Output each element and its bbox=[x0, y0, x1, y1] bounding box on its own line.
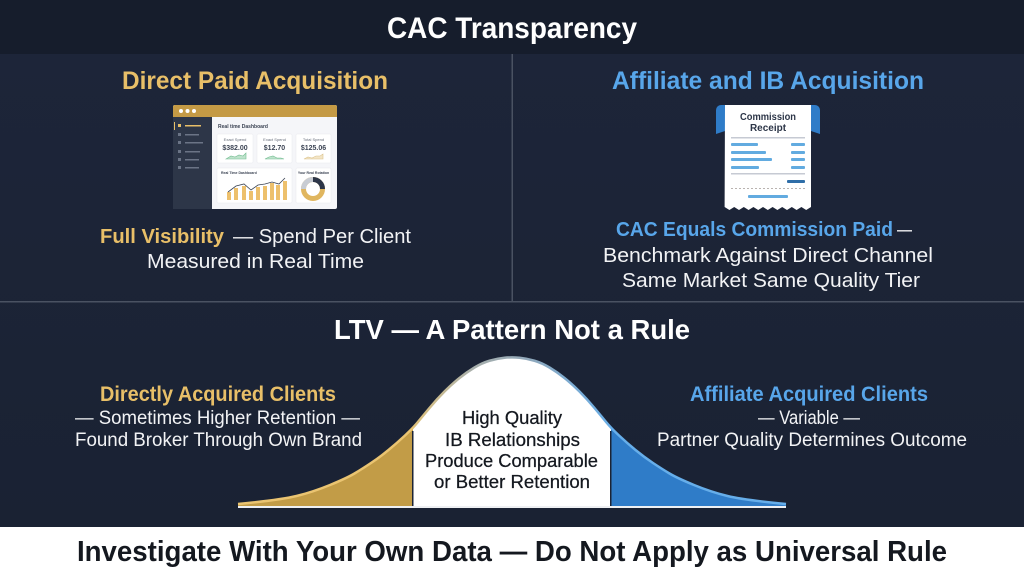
text: affiliate acquired clients: — Variable — bbox=[758, 408, 860, 429]
text: bell curve center: Produce Comparable bbox=[425, 450, 598, 471]
icon: real time dashboard: $382.00 bbox=[222, 145, 248, 152]
panel: direct paid acquisition bbox=[100, 67, 411, 273]
text: directly acquired clients: Found Broker Through Own Brand bbox=[75, 430, 362, 451]
icon: real time dashboard: Real Time Dashboard bbox=[221, 171, 257, 175]
icon: commission receipt: Receipt bbox=[750, 123, 787, 134]
text: CAC equals commission paid: — bbox=[897, 219, 912, 241]
icon: real time dashboard: $12.70 bbox=[264, 145, 285, 152]
title: CAC Transparency bbox=[387, 12, 637, 45]
icon: commission receipt bbox=[716, 105, 820, 210]
text: affiliate acquired clients bbox=[657, 383, 967, 451]
text: affiliate acquired clients: Partner Quality Determines Outcome bbox=[657, 430, 967, 451]
heading: direct paid: Direct Paid Acquisition bbox=[122, 67, 388, 95]
text: full visibility: — Spend Per Client bbox=[233, 225, 411, 248]
panel: LTV pattern bbox=[75, 314, 967, 508]
footer banner bbox=[0, 527, 1024, 572]
icon: real time dashboard: Real time Dashboard bbox=[218, 124, 268, 130]
panel: affiliate and IB acquisition bbox=[603, 67, 933, 292]
icon: real time dashboard: Total Spend bbox=[303, 137, 324, 142]
icon: real time dashboard: Exact Spend bbox=[224, 137, 246, 142]
heading: affiliate and IB: Affiliate and IB Acquisition bbox=[612, 67, 924, 95]
text: full visibility: Measured in Real Time bbox=[147, 250, 364, 273]
footer text: Investigate With Your Own Data — Do Not Apply as Universal Rule bbox=[77, 536, 947, 568]
text: affiliate acquired clients: Affiliate Acquired Clients bbox=[690, 383, 928, 406]
text: CAC equals commission paid: Benchmark Against Direct Channel bbox=[603, 244, 933, 267]
text: directly acquired clients: — Sometimes Higher Retention — bbox=[75, 408, 360, 429]
icon: real time dashboard bbox=[173, 105, 337, 209]
text: bell curve center: or Better Retention bbox=[434, 471, 590, 492]
text: directly acquired clients bbox=[75, 383, 362, 451]
text: bell curve center: High Quality bbox=[462, 407, 563, 428]
icon: real time dashboard: Exact Spend bbox=[263, 137, 286, 142]
text: bell curve center bbox=[425, 407, 598, 492]
header bar bbox=[0, 0, 1024, 54]
icon: real time dashboard: Your Real Rotation bbox=[298, 171, 329, 175]
text: full visibility bbox=[100, 225, 411, 273]
text: CAC equals commission paid: Same Market Same Quality Tier bbox=[622, 269, 920, 292]
chart: bell curve bbox=[238, 357, 786, 508]
icon: commission receipt: Commission bbox=[740, 112, 796, 123]
heading: LTV: LTV — A Pattern Not a Rule bbox=[334, 314, 690, 345]
text: CAC equals commission paid: CAC Equals Commission Paid bbox=[616, 219, 893, 241]
text: CAC equals commission paid bbox=[603, 219, 933, 292]
text: bell curve center: IB Relationships bbox=[445, 429, 580, 450]
text: directly acquired clients: Directly Acquired Clients bbox=[100, 383, 336, 406]
icon: real time dashboard: $125.06 bbox=[301, 145, 326, 152]
text: full visibility: Full Visibility bbox=[100, 226, 225, 248]
